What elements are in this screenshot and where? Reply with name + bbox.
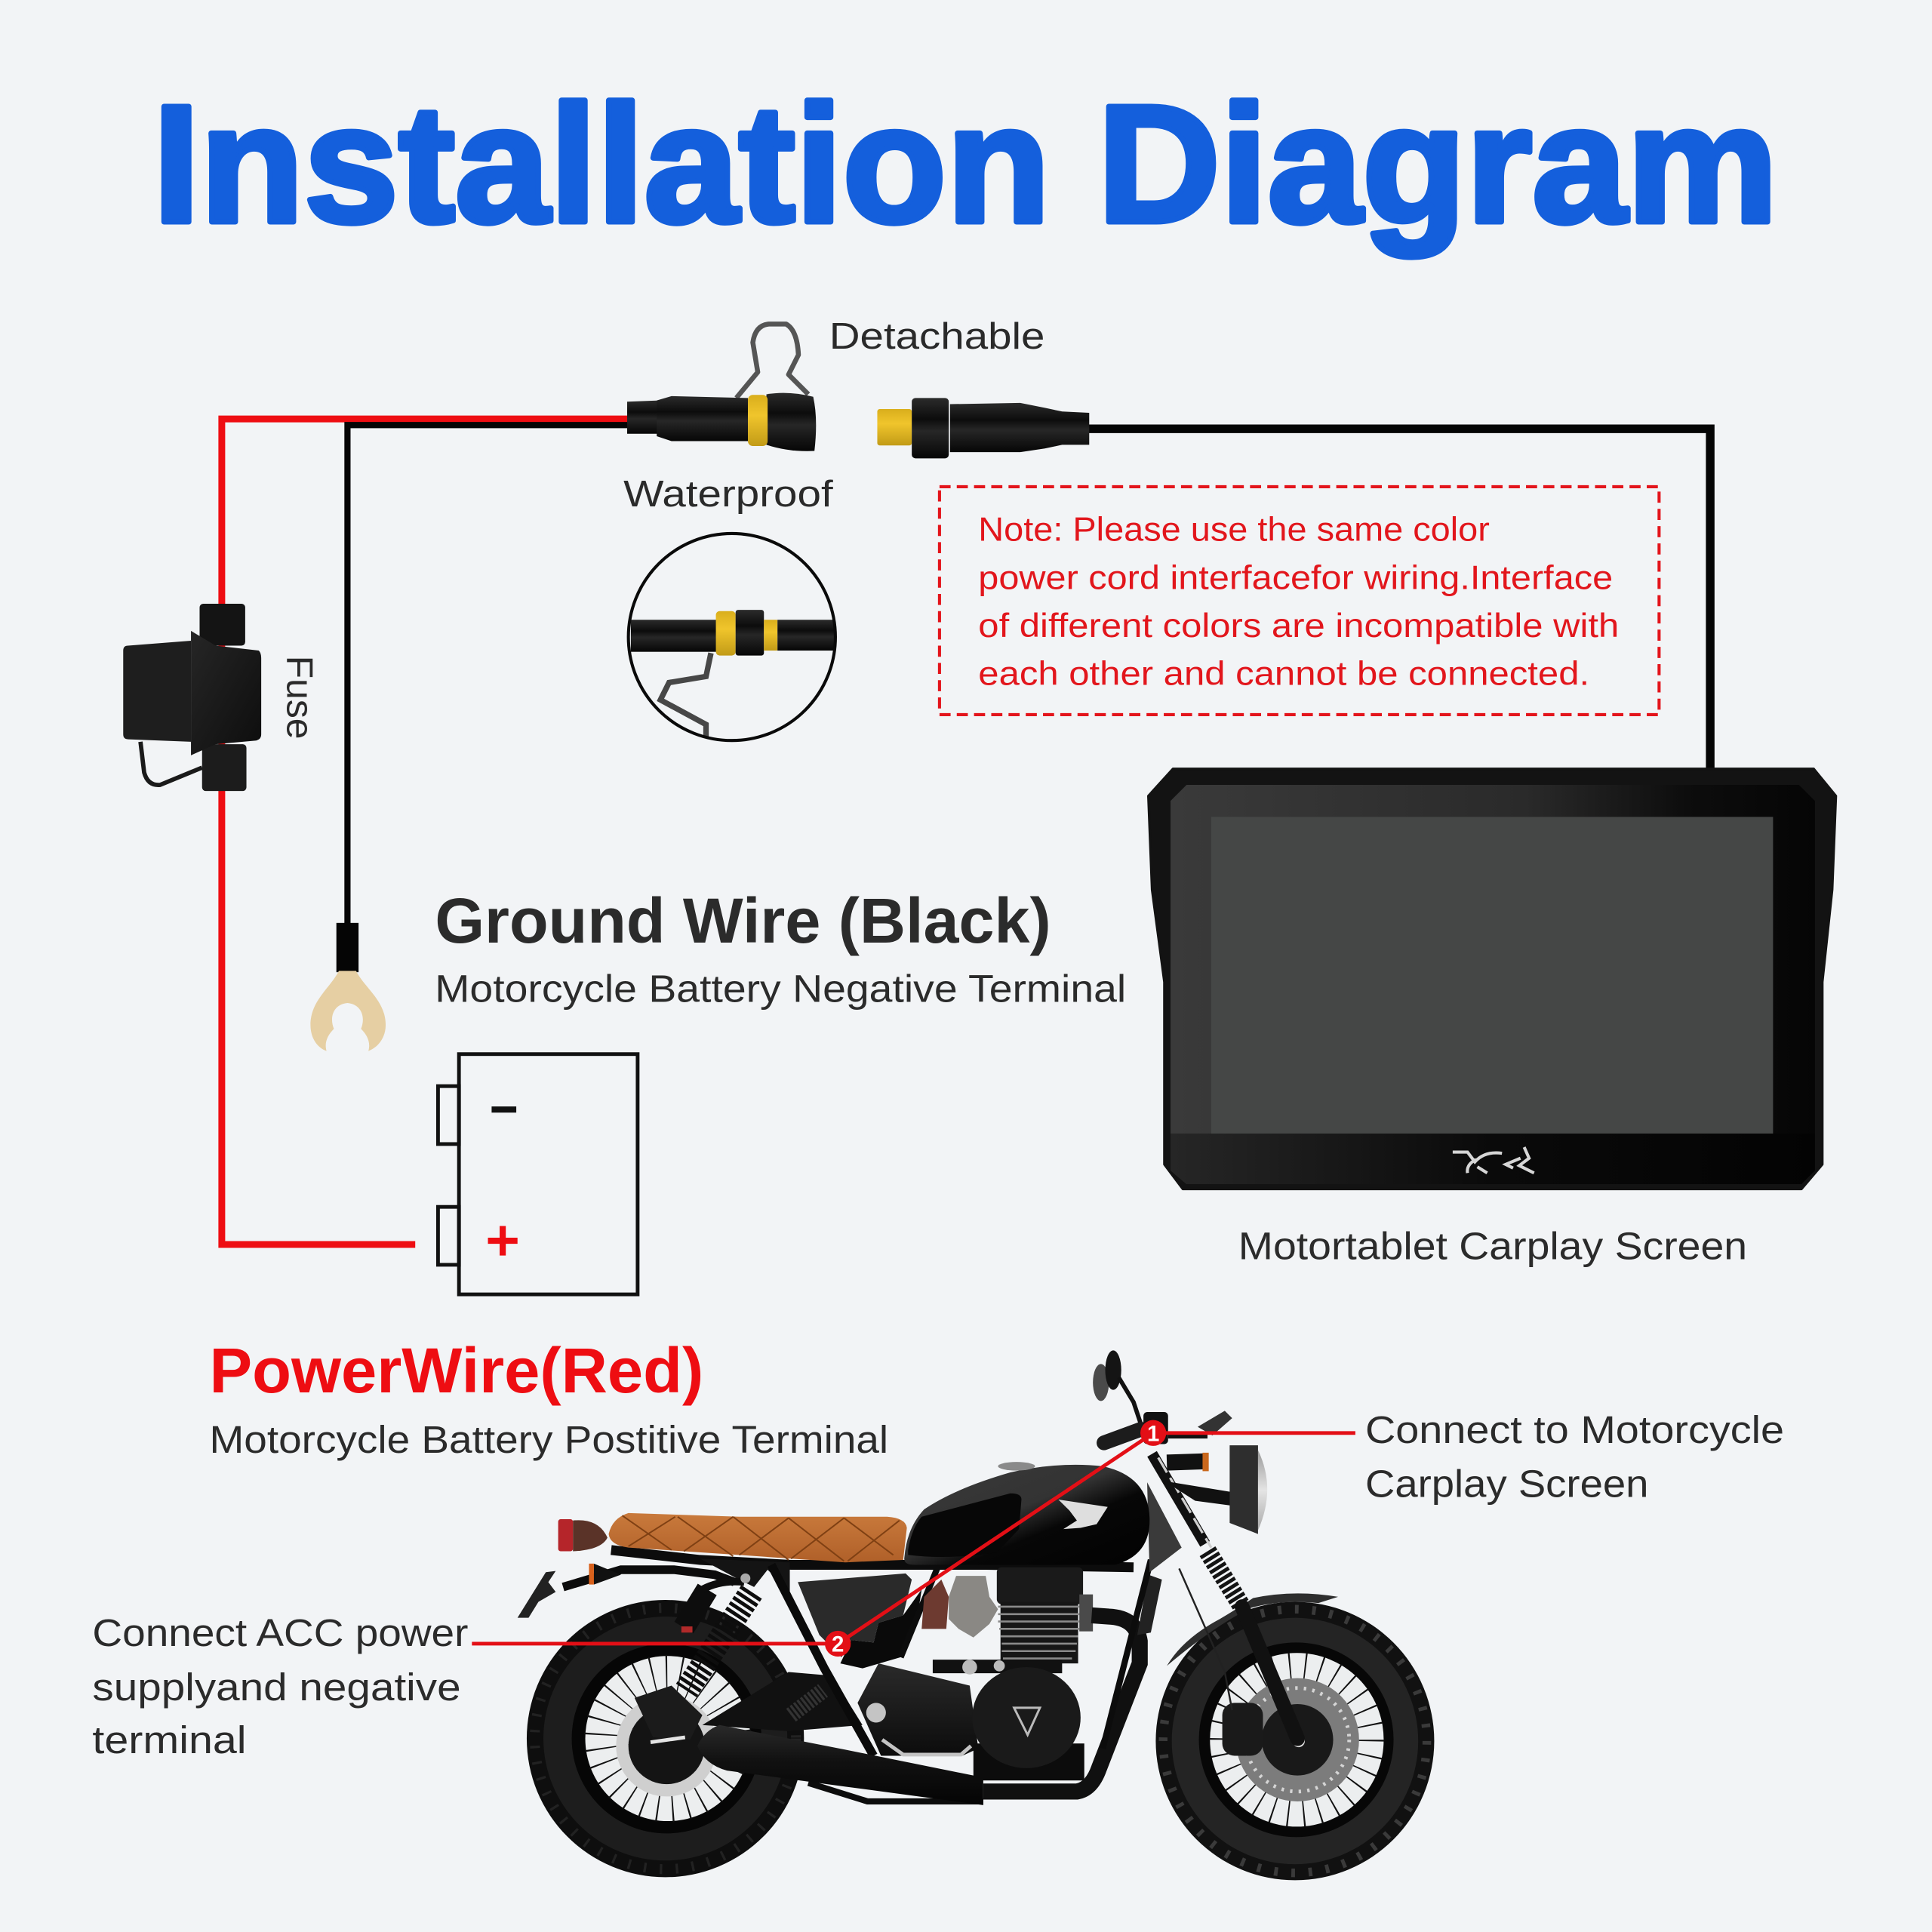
callout text: ACC power bbox=[92, 1611, 469, 1761]
rear disc bbox=[622, 1702, 711, 1790]
waterproof connection detail circle bbox=[629, 534, 835, 740]
left waterproof connector bbox=[627, 324, 816, 451]
front downtube bbox=[1103, 1560, 1151, 1749]
circle outline bbox=[629, 534, 835, 740]
neck gusset bbox=[1147, 1482, 1182, 1572]
marker 1 bbox=[1140, 1420, 1166, 1446]
air filter bbox=[921, 1580, 949, 1629]
rear rim opening bbox=[586, 1656, 750, 1821]
front rim opening bbox=[1210, 1653, 1383, 1826]
joined yellow plug bbox=[764, 620, 777, 651]
wiring: red power wire bbox=[222, 419, 629, 1244]
joined cable bbox=[631, 620, 717, 652]
note line 3: of different colors are incompatible with bbox=[978, 608, 1619, 645]
motorcycle bbox=[518, 1350, 1434, 1880]
wiring: black screen cable bbox=[1084, 429, 1710, 774]
rear hub bbox=[629, 1708, 705, 1784]
callout text: ACC power: supplyand negative bbox=[92, 1666, 461, 1709]
muffler bbox=[697, 1725, 983, 1805]
right waterproof connector bbox=[877, 398, 1089, 458]
label: Waterproof: Waterproof bbox=[623, 474, 833, 515]
clip detail bbox=[660, 653, 711, 737]
side panel lower bbox=[840, 1589, 921, 1669]
rear wheel bbox=[527, 1600, 804, 1877]
headlight bucket bbox=[1229, 1445, 1258, 1534]
rear tire sidewall bbox=[543, 1617, 787, 1860]
note box bbox=[940, 487, 1659, 715]
plus sign bbox=[488, 1226, 518, 1256]
marker 2 bbox=[825, 1631, 851, 1657]
exhaust port block bbox=[1079, 1595, 1093, 1632]
headlight lens bbox=[1258, 1451, 1267, 1531]
cover badge bbox=[1014, 1708, 1040, 1735]
rear axle bbox=[651, 1737, 685, 1743]
tank emblem bbox=[1058, 1500, 1108, 1529]
reservoir stem bbox=[1168, 1434, 1208, 1438]
tappet bolt bbox=[962, 1660, 977, 1675]
front rim bbox=[1199, 1642, 1394, 1837]
mirror back bbox=[1093, 1364, 1109, 1401]
screen glass bbox=[1171, 785, 1815, 1184]
indicator tip bbox=[589, 1564, 594, 1585]
yellow plug bbox=[877, 409, 912, 445]
oil cooler bbox=[1137, 1575, 1162, 1635]
callout text: carplay connection bbox=[1365, 1408, 1784, 1506]
callout lines bbox=[472, 1433, 1355, 1644]
negative terminal bbox=[438, 1086, 459, 1144]
tail light bbox=[558, 1519, 573, 1552]
front spokes bbox=[1235, 1678, 1358, 1801]
fuel tank bbox=[904, 1465, 1149, 1564]
cylinder block bbox=[1001, 1601, 1078, 1663]
strain relief bbox=[627, 401, 659, 434]
connector body bbox=[657, 396, 748, 441]
fuse cover bbox=[191, 631, 261, 755]
connector nut bbox=[912, 398, 949, 458]
front fender bbox=[1167, 1593, 1338, 1666]
bottom bezel bbox=[1171, 1134, 1815, 1184]
bracket bolt bbox=[740, 1574, 750, 1583]
engine lower block bbox=[974, 1743, 1084, 1780]
seat bbox=[609, 1513, 907, 1562]
swingarm bbox=[703, 1672, 863, 1731]
tank dark panel bbox=[908, 1494, 1021, 1557]
header pipe bbox=[983, 1615, 1140, 1792]
yellow ring bbox=[748, 395, 768, 446]
brake reservoir bbox=[1198, 1411, 1232, 1435]
seat rail bbox=[611, 1550, 1134, 1567]
handlebar grip bbox=[1104, 1429, 1141, 1443]
title: Installation Diagram bbox=[152, 71, 1778, 258]
front disc perforation bbox=[1246, 1688, 1349, 1792]
wiring: black ground wire bbox=[347, 425, 629, 927]
front disc carrier bbox=[1262, 1704, 1334, 1776]
carplay screen bbox=[1149, 769, 1836, 1189]
callout text: ACC power: terminal bbox=[92, 1718, 247, 1761]
tank cap bbox=[998, 1462, 1035, 1471]
engine bolt bbox=[866, 1703, 886, 1722]
cylinder head bbox=[997, 1567, 1083, 1604]
note line 2: power cord interfacefor wiring.Interface bbox=[978, 559, 1613, 596]
mirror stem bbox=[1118, 1377, 1141, 1424]
cylinder fins bbox=[998, 1607, 1081, 1659]
headlight bracket bbox=[1164, 1481, 1232, 1506]
shock spring bbox=[686, 1592, 752, 1690]
carburetor bbox=[949, 1576, 998, 1638]
marker 1: 1 bbox=[1147, 1421, 1159, 1446]
joined yellow ring bbox=[716, 611, 736, 656]
fork lower bbox=[1242, 1607, 1297, 1739]
side panel bbox=[798, 1574, 912, 1657]
battery body bbox=[459, 1054, 638, 1294]
logo bbox=[1453, 1147, 1534, 1173]
terminal sleeve bbox=[337, 923, 358, 972]
fuse holder bbox=[123, 604, 261, 791]
frame rear tube bbox=[771, 1564, 874, 1756]
handlebar clamp bbox=[1143, 1412, 1168, 1444]
rear tread bbox=[535, 1608, 796, 1869]
joined cable right bbox=[777, 620, 834, 651]
brake cable bbox=[1179, 1568, 1232, 1710]
front axle bbox=[1293, 1735, 1305, 1747]
label: Detachable: Detachable bbox=[829, 316, 1044, 357]
callout text: carplay connection: Carplay Screen bbox=[1365, 1463, 1648, 1506]
front indicator bbox=[1167, 1461, 1205, 1463]
callout text: ACC power: Connect ACC power bbox=[92, 1611, 469, 1654]
shock reflector bbox=[681, 1626, 693, 1632]
callout line between points bbox=[838, 1433, 1153, 1644]
label: Fuse: Fuse bbox=[278, 656, 319, 740]
callout line to label 1 bbox=[1153, 1432, 1355, 1434]
front wheel bbox=[1155, 1601, 1434, 1880]
front tread bbox=[1163, 1609, 1427, 1873]
fork chrome bbox=[1158, 1457, 1211, 1548]
power wire heading: PowerWire(Red) bbox=[210, 1334, 703, 1406]
connector cap bbox=[767, 393, 816, 451]
connector black body bbox=[950, 403, 1089, 452]
fuse body bbox=[123, 641, 191, 742]
dashed border bbox=[940, 487, 1659, 715]
positive terminal bbox=[438, 1207, 459, 1265]
callout line to label 2 bbox=[472, 1642, 838, 1644]
rear spokes bbox=[610, 1681, 726, 1796]
rear brake bracket bbox=[635, 1685, 703, 1740]
ring terminal bbox=[310, 923, 386, 1051]
rear indicator bbox=[594, 1564, 621, 1585]
rear strut bbox=[563, 1570, 734, 1587]
shock canister bbox=[684, 1589, 707, 1628]
battery bbox=[438, 1054, 638, 1294]
seat quilting bbox=[622, 1515, 900, 1561]
tail light housing bbox=[573, 1520, 608, 1552]
marker 2: 2 bbox=[832, 1632, 844, 1657]
front caliper bbox=[1223, 1703, 1263, 1756]
terminal fork bbox=[310, 971, 386, 1051]
engine base bbox=[933, 1660, 1062, 1673]
front tire sidewall bbox=[1172, 1618, 1418, 1864]
fork gaiter bbox=[1208, 1552, 1242, 1607]
fork upper bbox=[1152, 1454, 1205, 1544]
callout text: carplay connection: Connect to Motorcycle bbox=[1365, 1408, 1784, 1451]
license plate bracket bbox=[518, 1571, 555, 1618]
kick pedal bbox=[882, 1740, 971, 1755]
fuse top stub bbox=[199, 604, 245, 646]
screen housing bbox=[1149, 769, 1836, 1189]
under-engine bar bbox=[808, 1783, 983, 1801]
screen caption: Motortablet Carplay Screen bbox=[1238, 1225, 1747, 1268]
note line 4: each other and cannot be connected. bbox=[978, 656, 1589, 693]
power wire description: Motorcycle Battery Postitive Terminal bbox=[210, 1418, 888, 1461]
front tire bbox=[1155, 1601, 1434, 1880]
fuse loop bbox=[140, 742, 202, 785]
clutch cover bbox=[972, 1667, 1081, 1768]
active display bbox=[1211, 817, 1773, 1134]
foot peg bbox=[791, 1690, 823, 1715]
engine bolt 2 bbox=[994, 1660, 1004, 1672]
minus sign bbox=[491, 1106, 516, 1112]
note line 1: Note: Please use the same color bbox=[978, 512, 1490, 549]
joined cap bbox=[736, 610, 764, 656]
shock top arm bbox=[703, 1582, 744, 1589]
seat bracket bbox=[700, 1558, 790, 1592]
rear rim bbox=[572, 1644, 761, 1833]
mirror bbox=[1105, 1350, 1121, 1390]
ground wire description: Motorcycle Battery Negative Terminal bbox=[435, 967, 1126, 1010]
frame mid tube bbox=[900, 1567, 937, 1657]
ground wire heading: Ground Wire (Black) bbox=[435, 884, 1051, 956]
gearbox plate bbox=[857, 1663, 978, 1756]
rear tire bbox=[527, 1600, 804, 1877]
indicator lens bbox=[1202, 1453, 1209, 1471]
retaining clip bbox=[737, 324, 808, 398]
front disc bbox=[1236, 1678, 1359, 1801]
fuse bottom stub bbox=[202, 744, 247, 791]
